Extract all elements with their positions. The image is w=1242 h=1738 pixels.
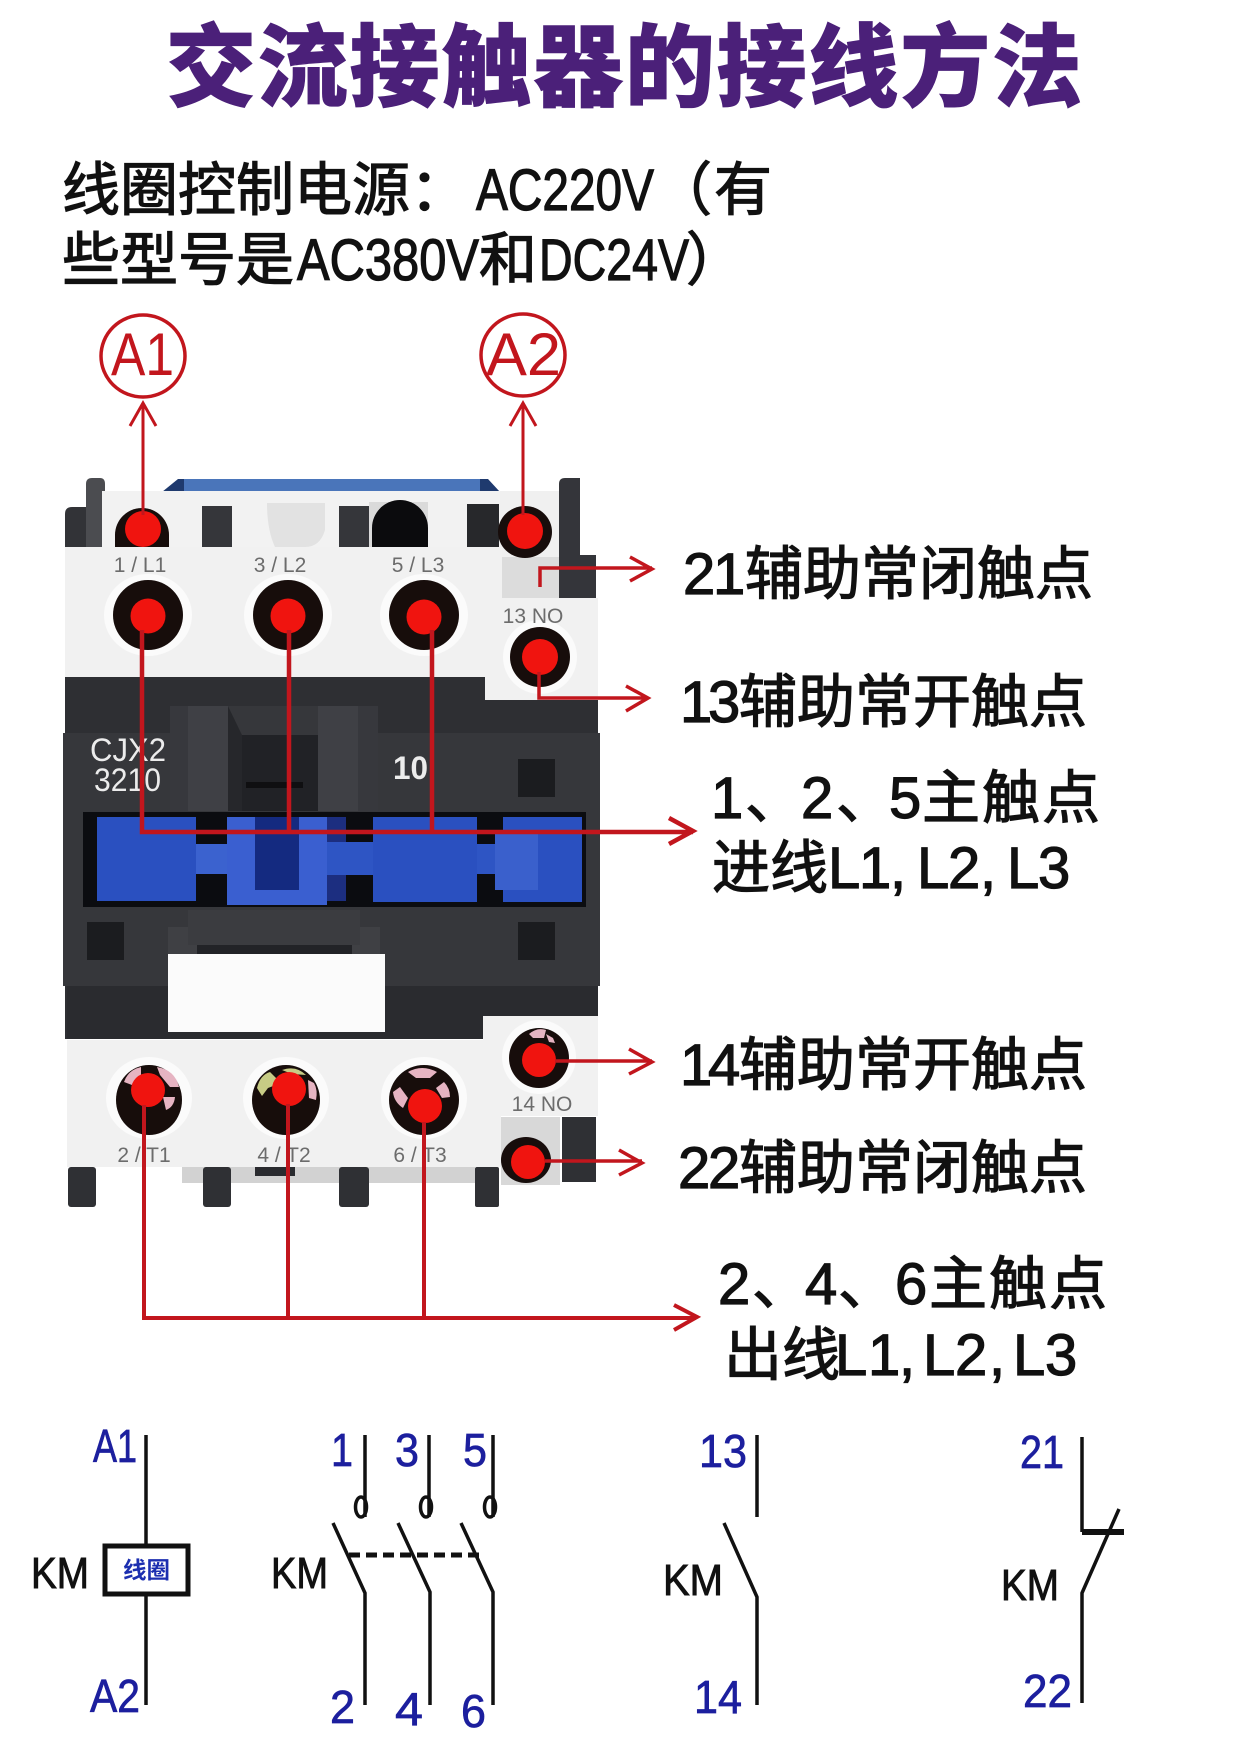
symbol: main contacts: 4 bbox=[395, 1683, 423, 1735]
terminal labels: 14 NO bbox=[512, 1093, 572, 1116]
subtitle: coil control power: 线圈控制电源： bbox=[62, 158, 468, 223]
model text bbox=[90, 732, 428, 798]
arrow: 13 bbox=[539, 672, 648, 711]
label: main contact output: 4 bbox=[805, 1252, 837, 1317]
symbol: normally open auxiliary contact: 13 bbox=[699, 1425, 747, 1477]
label: main contact output: 6 bbox=[895, 1252, 927, 1317]
label: main contact output: 、 bbox=[838, 1252, 896, 1317]
bottom white terminal band bbox=[67, 1016, 598, 1167]
subtitle: coil control power: 和 bbox=[479, 228, 537, 293]
symbol: coil: A1 bbox=[93, 1420, 137, 1472]
symbol: main contacts: 5 bbox=[463, 1424, 487, 1476]
label: main contact input: 进线 bbox=[712, 836, 828, 901]
square holes bbox=[87, 759, 555, 960]
subtitle: coil control power: 有 bbox=[714, 158, 772, 223]
label: main contact output: 出线 bbox=[724, 1323, 840, 1388]
A2 callout: A2 bbox=[486, 321, 561, 388]
arrow: 22 bbox=[545, 1150, 642, 1175]
symbol: coil: 线圈 bbox=[123, 1557, 170, 1583]
lower clip bbox=[168, 910, 380, 955]
subtitle: coil control power: AC380V bbox=[297, 228, 479, 293]
screw highlights bbox=[124, 1029, 555, 1110]
terminal dots bbox=[125, 511, 558, 1179]
mid panel bbox=[63, 733, 600, 986]
label: main contact output: L bbox=[1013, 1323, 1045, 1388]
contactor device bbox=[63, 478, 600, 1207]
label: main contact output: 1 bbox=[868, 1323, 900, 1388]
rear white housing bbox=[102, 491, 559, 598]
A2 wire with arrow bbox=[510, 403, 536, 515]
A1 wire with arrow bbox=[130, 403, 156, 515]
label: main contact input: , bbox=[980, 836, 996, 901]
top blue strip bbox=[162, 479, 500, 492]
label: 14 NO contact: 1 bbox=[680, 1033, 712, 1098]
label: main contact input: L bbox=[828, 836, 860, 901]
label: 22 NC contact: 辅助常闭触点 bbox=[739, 1136, 1087, 1201]
label: main contact input: L bbox=[917, 836, 949, 901]
label: 14 NO contact: 辅助常开触点 bbox=[739, 1033, 1087, 1098]
A1 callout: A1 bbox=[111, 321, 174, 388]
label: main contact output: 2 bbox=[955, 1323, 987, 1388]
terminal labels: 5 / L3 bbox=[392, 554, 444, 577]
label: main contact input bbox=[711, 766, 1100, 901]
title: 交流接触器的接线方法 bbox=[166, 19, 1082, 119]
terminal labels: 4 / T2 bbox=[257, 1144, 311, 1167]
blue actuator window bbox=[83, 812, 586, 907]
symbol: normally open auxiliary contact bbox=[663, 1425, 757, 1723]
label: main contact input: 2 bbox=[948, 836, 980, 901]
symbol: main contacts bbox=[271, 1424, 496, 1737]
label: main contact output: L bbox=[835, 1323, 867, 1388]
subtitle: coil control power: 些型号是 bbox=[62, 228, 294, 293]
model text: 10 bbox=[393, 750, 428, 786]
terminal labels: 6 / T3 bbox=[393, 1144, 447, 1167]
label: main contact input: 1 bbox=[711, 766, 743, 831]
subtitle: coil control power bbox=[62, 158, 772, 293]
label: main contact output: 、 bbox=[752, 1252, 810, 1317]
label: main contact output: 主触点 bbox=[929, 1252, 1107, 1317]
symbol: normally closed auxiliary contact: 22 bbox=[1023, 1665, 1072, 1717]
label: main contact input: 5 bbox=[889, 766, 921, 831]
subtitle: coil control power: （ bbox=[654, 158, 712, 223]
symbol: coil: A2 bbox=[90, 1670, 140, 1722]
symbol: normally closed auxiliary contact: 21 bbox=[1020, 1426, 1064, 1478]
label: main contact input: 主触点 bbox=[922, 766, 1100, 831]
symbol: normally open auxiliary contact: KM bbox=[663, 1556, 723, 1605]
symbol: main contacts: 2 bbox=[330, 1681, 355, 1733]
label: 21 NC contact: 2 bbox=[683, 542, 715, 607]
label: main contact input: 、 bbox=[745, 766, 803, 831]
symbol: normally closed auxiliary contact: KM bbox=[1001, 1561, 1059, 1610]
terminal labels: 13 NO bbox=[503, 605, 563, 628]
terminal sockets bbox=[104, 506, 577, 1183]
label: main contact output: , bbox=[989, 1323, 1005, 1388]
label: main contact output bbox=[718, 1252, 1107, 1388]
arrow: 21 bbox=[540, 557, 652, 587]
model text: CJX2 bbox=[90, 732, 166, 768]
symbol: main contacts: 1 bbox=[331, 1424, 353, 1476]
label: main contact input: L bbox=[1007, 836, 1039, 901]
terminal labels: 3 / L2 bbox=[254, 554, 306, 577]
arrow: 14 bbox=[555, 1049, 652, 1074]
white label bbox=[168, 954, 385, 1032]
symbol: main contacts: 3 bbox=[395, 1424, 419, 1476]
symbol: main contacts: KM bbox=[271, 1549, 328, 1598]
top white terminal band bbox=[65, 547, 598, 700]
label: 13 NO contact: 3 bbox=[708, 670, 740, 735]
terminal labels bbox=[114, 554, 572, 1167]
symbol: main contacts: 6 bbox=[461, 1685, 486, 1737]
symbol: normally closed auxiliary contact bbox=[1001, 1426, 1124, 1717]
terminal labels: 1 / L1 bbox=[114, 554, 166, 577]
label: main contact input: , bbox=[890, 836, 906, 901]
label: 22 NC contact: 2 bbox=[678, 1136, 710, 1201]
arrow: main output bbox=[144, 1104, 697, 1330]
symbol: coil bbox=[31, 1420, 188, 1722]
terminal labels: 2 / T1 bbox=[117, 1144, 171, 1167]
label: main contact input: 3 bbox=[1038, 836, 1070, 901]
label: 13 NO contact: 1 bbox=[680, 670, 712, 735]
subtitle: coil control power: DC24V bbox=[539, 228, 689, 293]
symbol: normally open auxiliary contact: 14 bbox=[694, 1671, 742, 1723]
subtitle: coil control power: ） bbox=[686, 228, 744, 293]
center upper block bbox=[170, 706, 378, 811]
label: main contact output: 2 bbox=[718, 1252, 750, 1317]
label: main contact output: L bbox=[923, 1323, 955, 1388]
subtitle: coil control power: AC220V bbox=[476, 158, 654, 223]
feet and lower rear bbox=[68, 1117, 596, 1207]
dark rear ears bbox=[65, 478, 596, 598]
label: 13 NO contact: 辅助常开触点 bbox=[739, 670, 1087, 735]
label: main contact input: 2 bbox=[801, 766, 833, 831]
label: 21 NC contact: 1 bbox=[713, 542, 745, 607]
label: 22 NC contact: 2 bbox=[708, 1136, 740, 1201]
label: main contact input: 、 bbox=[836, 766, 894, 831]
label: main contact output: 3 bbox=[1045, 1323, 1077, 1388]
label: 21 NC contact: 辅助常闭触点 bbox=[745, 542, 1093, 607]
label: main contact output: , bbox=[899, 1323, 915, 1388]
lower body shade bbox=[67, 986, 598, 1039]
model text: 3210 bbox=[94, 762, 161, 798]
label: 14 NO contact: 4 bbox=[708, 1033, 740, 1098]
symbol: coil: KM bbox=[31, 1549, 89, 1598]
arrow: main input bbox=[142, 630, 693, 844]
dark body bbox=[65, 677, 598, 1039]
label: main contact input: 1 bbox=[859, 836, 891, 901]
